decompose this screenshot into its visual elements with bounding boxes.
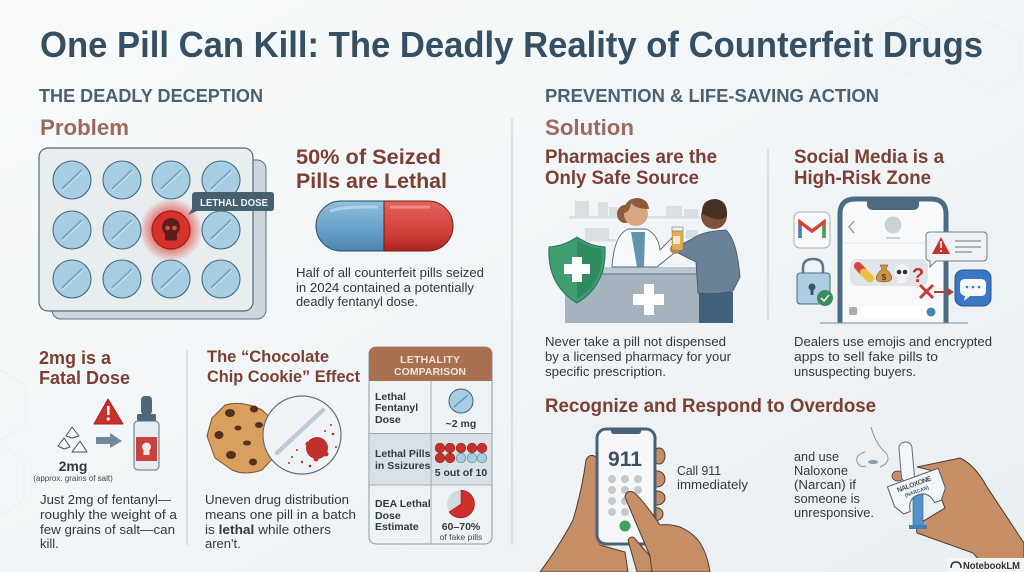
icon: chat app bbox=[955, 270, 991, 306]
icon: cut pill with uneven drug spots bbox=[263, 396, 341, 474]
block: 2mg is a fatal dose: 2mg bbox=[59, 458, 87, 474]
icon: blocked arrow bbox=[920, 285, 954, 298]
block: 50% of seized pills: 50% of Seized bbox=[296, 146, 441, 169]
spray label bbox=[887, 468, 949, 516]
block: social media: unsuspecting buyers. bbox=[794, 364, 916, 379]
phone bbox=[597, 429, 655, 544]
block: pharmacies: by a licensed pharmacy for your bbox=[545, 349, 732, 364]
block: chocolate chip cookie effect: Uneven drug distribution bbox=[205, 492, 349, 507]
icon: salt grains bbox=[58, 427, 87, 452]
table header bbox=[394, 354, 466, 378]
block: 2mg is a fatal dose: Fatal Dose bbox=[39, 368, 130, 388]
blister pack illustration bbox=[39, 148, 274, 319]
block: 2mg is a fatal dose: few grains of salt—can bbox=[40, 522, 175, 537]
pointing hand bbox=[625, 492, 710, 572]
subheading: solution: Solution bbox=[545, 115, 634, 140]
block: social media: Social Media is a bbox=[794, 147, 944, 168]
block: pharmacies: Never take a pill not dispensed bbox=[545, 334, 726, 349]
block: 50% of seized pills: deadly fentanyl dose. bbox=[296, 294, 418, 309]
icon: arrow bbox=[96, 433, 122, 448]
subheading: problem: Problem bbox=[40, 115, 129, 140]
row: lethal pills in seizures: Lethal Pills bbox=[375, 448, 431, 460]
text: use naloxone: unresponsive. bbox=[794, 505, 874, 520]
table header: COMPARISON bbox=[394, 366, 466, 378]
message bubble with emojis bbox=[850, 259, 928, 287]
illustration: hand holding phone dialing 911 bbox=[540, 429, 710, 572]
block: social media bbox=[794, 147, 992, 379]
row: dea lethal dose estimate: Estimate bbox=[375, 521, 419, 533]
block: chocolate chip cookie effect: is lethal while others bbox=[205, 522, 332, 537]
row: lethal fentanyl dose: ~2 mg bbox=[446, 418, 476, 430]
row: dea lethal dose estimate bbox=[375, 490, 482, 542]
block: chocolate chip cookie effect: aren't. bbox=[205, 536, 241, 551]
spray label: (NARCAN) bbox=[904, 485, 930, 499]
block: 2mg is a fatal dose: (approx. grains of salt) bbox=[33, 474, 113, 483]
block: 2mg is a fatal dose: 2mg is a bbox=[39, 348, 112, 368]
text: use naloxone: someone is bbox=[794, 491, 860, 506]
icon: alert bubble bbox=[926, 232, 987, 267]
icon: capsule bbox=[316, 201, 453, 251]
row: lethal pills in seizures: 5 out of 10 bbox=[435, 467, 487, 479]
section heading: prevention: PREVENTION & LIFE-SAVING ACTION bbox=[545, 86, 879, 106]
message bubble with emojis: $ bbox=[882, 273, 887, 282]
icon: green shield bbox=[549, 237, 605, 303]
callout: lethal dose bbox=[188, 192, 274, 215]
block: 50% of seized pills bbox=[296, 146, 484, 309]
bottle bbox=[672, 227, 683, 250]
row: dea lethal dose estimate: DEA Lethal bbox=[375, 498, 431, 510]
customer bbox=[670, 199, 740, 323]
block: pharmacies: specific prescription. bbox=[545, 364, 666, 379]
block: 2mg is a fatal dose: Just 2mg of fentanyl— bbox=[40, 492, 171, 507]
spray label: NALOXONE bbox=[896, 475, 933, 494]
block: 50% of seized pills: Pills are Lethal bbox=[296, 170, 447, 193]
title: One Pill Can Kill: The Deadly Reality of Counterfeit Drugs bbox=[40, 24, 983, 65]
block: social media: Dealers use emojis and encrypted bbox=[794, 334, 992, 349]
row: lethal pills in seizures: in Ssizures bbox=[375, 460, 431, 472]
text: call 911: immediately bbox=[677, 477, 749, 492]
callout: lethal dose: LETHAL DOSE bbox=[200, 198, 268, 209]
panel: the deadly deception bbox=[33, 86, 492, 551]
block: social media: apps to sell fake pills to bbox=[794, 349, 938, 364]
text: call 911 bbox=[677, 463, 749, 492]
row: lethal pills in seizures bbox=[375, 443, 487, 479]
heading: recognize and respond: Recognize and Respond to Overdose bbox=[545, 396, 876, 417]
watermark: notebooklm bbox=[947, 558, 1024, 572]
row: lethal fentanyl dose: Fentanyl bbox=[375, 402, 418, 414]
block: social media: High-Risk Zone bbox=[794, 168, 931, 189]
icon: fentanyl bottle bbox=[134, 396, 159, 470]
illustration: hand holding phone dialing 911: 911 bbox=[608, 448, 642, 471]
row: dea lethal dose estimate: of fake pills bbox=[440, 532, 482, 542]
icon: padlock bbox=[797, 259, 833, 306]
block: chocolate chip cookie effect: means one pill in a batch bbox=[205, 507, 356, 522]
text: use naloxone: (Narcan) if bbox=[794, 477, 856, 492]
row: lethal fentanyl dose bbox=[375, 389, 476, 430]
text: use naloxone bbox=[794, 449, 874, 520]
illustration: pharmacy counter bbox=[549, 198, 740, 323]
block: 50% of seized pills: in 2024 contained a potentially bbox=[296, 280, 474, 295]
pharmacist bbox=[612, 198, 678, 267]
icon: cookie bbox=[207, 403, 278, 473]
table header: LETHALITY bbox=[400, 354, 460, 366]
block: pharmacies: Only Safe Source bbox=[545, 168, 699, 189]
message bubble with emojis: ? bbox=[912, 265, 924, 287]
counter bbox=[565, 267, 699, 323]
block: 50% of seized pills: Half of all counterfeit pills seized bbox=[296, 265, 484, 280]
row: dea lethal dose estimate: Dose bbox=[375, 510, 401, 522]
illustration: hand with naloxone spray bbox=[887, 441, 1024, 572]
text: use naloxone: and use bbox=[794, 449, 839, 464]
block: pharmacies bbox=[545, 147, 740, 379]
row: lethal fentanyl dose: Dose bbox=[375, 414, 401, 426]
icon: nose bbox=[857, 427, 888, 467]
block: 2mg is a fatal dose: roughly the weight of a bbox=[40, 507, 178, 522]
icon: warning triangle bbox=[94, 399, 123, 424]
table: lethality comparison bbox=[369, 347, 492, 544]
panel: prevention and life-saving action bbox=[540, 86, 1024, 572]
icon: lethal pill with skull bbox=[139, 198, 203, 262]
block: 2mg is a fatal dose: kill. bbox=[40, 536, 59, 551]
row: dea lethal dose estimate: 60–70% bbox=[442, 521, 481, 533]
text: use naloxone: Naloxone bbox=[794, 463, 848, 478]
block: pharmacies: Pharmacies are the bbox=[545, 147, 717, 168]
left hand behind phone bbox=[540, 455, 628, 572]
block: 2mg is a fatal dose bbox=[33, 348, 178, 551]
block: chocolate chip cookie effect: The “Chocolate bbox=[207, 347, 329, 366]
block: chocolate chip cookie effect: Chip Cookie” Effect bbox=[207, 367, 360, 386]
row: lethal fentanyl dose: Lethal bbox=[375, 391, 406, 403]
section heading: the deadly deception: THE DEADLY DECEPTION bbox=[39, 86, 263, 106]
illustration: phone with messages bbox=[794, 199, 991, 323]
icon: gmail bbox=[794, 212, 830, 248]
text: call 911: Call 911 bbox=[677, 463, 721, 478]
block: chocolate chip cookie effect bbox=[205, 347, 360, 551]
